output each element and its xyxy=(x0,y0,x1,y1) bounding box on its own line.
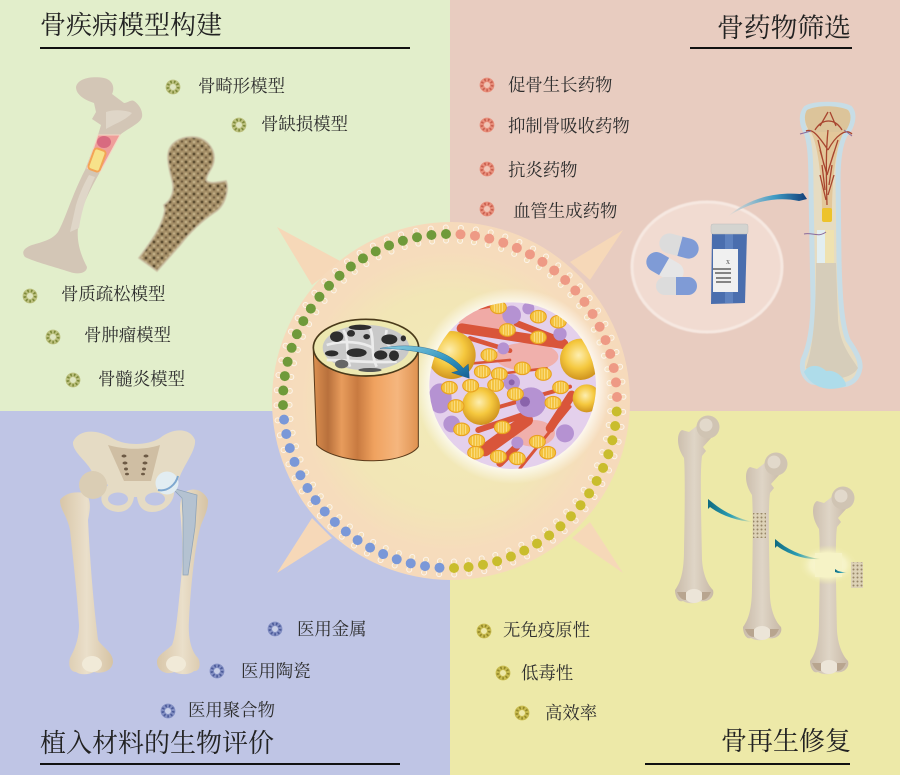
label: medical ceramic: 医用陶瓷 xyxy=(241,661,311,681)
panel: top-right background xyxy=(450,0,900,411)
panel: bottom-right background xyxy=(450,411,900,775)
bottle xyxy=(711,224,748,304)
left femur xyxy=(60,492,113,674)
label: osteomyelitis model: 骨髓炎模型 xyxy=(98,369,185,389)
femur: with gap and graft xyxy=(798,486,863,674)
long bone with vessels xyxy=(800,104,860,389)
arrow: drug to bone xyxy=(727,193,807,217)
label: deformity model: 骨畸形模型 xyxy=(198,76,285,96)
blue cartilage xyxy=(804,366,846,389)
heading: implant evaluation: 植入材料的生物评价 xyxy=(40,729,274,758)
arrow: regeneration step 3 xyxy=(835,569,847,573)
label: bone tumor model: 骨肿瘤模型 xyxy=(84,325,171,345)
panel: bottom-left background xyxy=(0,411,450,775)
femur: with scaffold xyxy=(743,452,788,640)
pelvis with femurs and implant xyxy=(60,430,208,674)
porous femoral head section xyxy=(139,137,227,271)
label: bone growth drug: 促骨生长药物 xyxy=(508,75,612,95)
label: high efficiency: 高效率 xyxy=(545,703,597,723)
cell glow xyxy=(415,288,611,484)
heading: bone regeneration: 骨再生修复 xyxy=(721,727,851,756)
implant ball xyxy=(156,472,178,494)
label: high efficiency xyxy=(516,703,597,723)
mitochondria xyxy=(441,301,569,465)
right femur xyxy=(157,490,208,674)
bead ring xyxy=(266,217,634,585)
hub disk xyxy=(272,222,630,580)
label: low toxicity: 低毒性 xyxy=(521,663,573,683)
implant stem xyxy=(172,488,197,575)
bottle: x xyxy=(726,257,730,266)
panel: top-left background xyxy=(0,0,450,411)
microscopic cell view xyxy=(428,301,601,469)
pelvis xyxy=(73,430,195,512)
label: low toxicity xyxy=(497,663,573,683)
label: anti-inflammatory: 抗炎药物 xyxy=(508,160,578,180)
gold spheres xyxy=(428,331,476,379)
vessels xyxy=(806,112,852,205)
capsule 1 xyxy=(657,231,701,261)
arrow: regeneration step 1 xyxy=(708,499,753,522)
label: defect model: 骨缺损模型 xyxy=(261,114,348,134)
femur: healed xyxy=(675,416,720,603)
capsule 2 xyxy=(643,248,687,286)
central hub xyxy=(266,217,634,585)
label: medical polymer: 医用聚合物 xyxy=(188,700,275,720)
bone with lesion xyxy=(23,77,142,273)
hub spikes xyxy=(277,227,623,573)
label: osteoporosis model: 骨质疏松模型 xyxy=(61,284,165,304)
heading: bone disease model: 骨疾病模型构建 xyxy=(40,11,222,40)
label: medical metal: 医用金属 xyxy=(297,619,367,639)
arrow: regeneration step 2 xyxy=(775,539,820,559)
arrow: bone to cells xyxy=(380,346,469,378)
label: non-immunogenic: 无免疫原性 xyxy=(503,620,590,640)
bone cylinder xyxy=(313,319,419,461)
label: resorption inhibitor: 抑制骨吸收药物 xyxy=(508,116,630,136)
drug circle with pills xyxy=(632,202,782,332)
heading: bone drug screening: 骨药物筛选 xyxy=(717,13,851,43)
capsule 3 xyxy=(656,277,697,295)
label: angiogenesis drug: 血管生成药物 xyxy=(513,201,617,221)
